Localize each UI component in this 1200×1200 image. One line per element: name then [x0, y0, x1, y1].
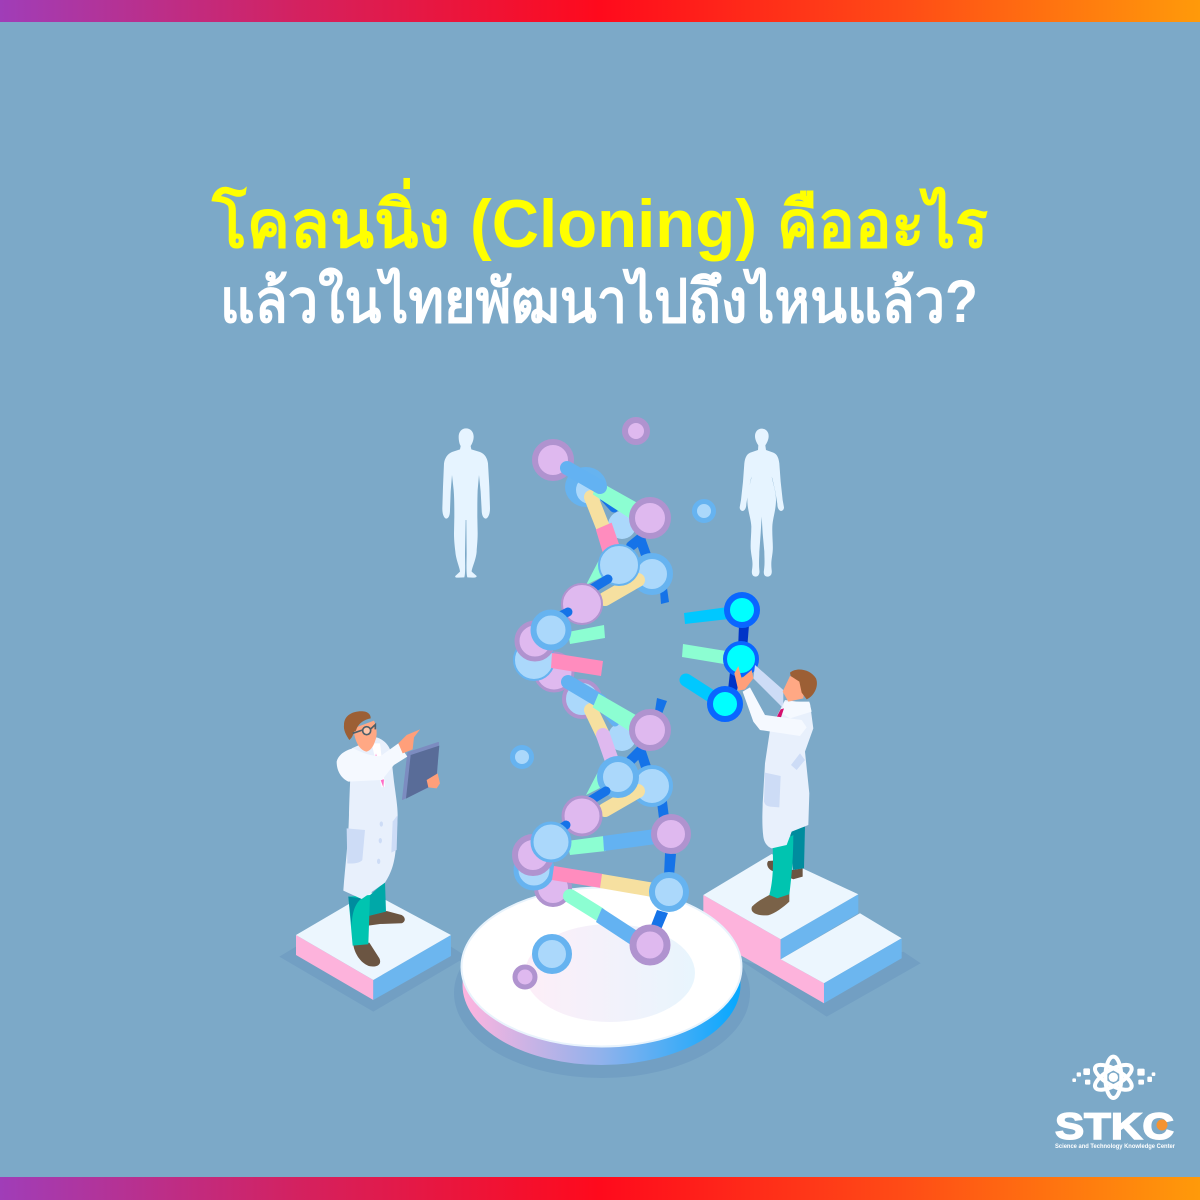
- title line 1: (Cloning): [470, 186, 757, 262]
- lab coat: [762, 700, 813, 848]
- back nodes: [564, 681, 600, 717]
- links: [738, 625, 749, 650]
- front shoe: [353, 943, 380, 967]
- cluster left: [535, 653, 573, 691]
- title line 1: คืออะไร: [777, 186, 988, 261]
- collar and tie: [782, 702, 812, 718]
- disc top: [462, 888, 742, 1046]
- title line 1: [211, 177, 988, 262]
- floating molecules: [512, 420, 714, 987]
- disc inner ellipse: [525, 924, 695, 1022]
- title: [211, 177, 988, 335]
- back arm: [753, 665, 783, 708]
- cyan nodes: [727, 595, 757, 625]
- pocket: [764, 773, 781, 807]
- cyan bars: [684, 607, 729, 624]
- back leg: [790, 827, 805, 870]
- tablet: [403, 743, 438, 799]
- title line 1: โคลนนิ่ง: [211, 177, 450, 261]
- molecule right blue: [694, 502, 714, 520]
- upper step top: [703, 854, 858, 939]
- front shoe: [752, 893, 789, 915]
- platform top: [296, 892, 451, 980]
- disc side: [462, 905, 740, 1065]
- node purple bottom: [633, 928, 667, 962]
- hand: [734, 666, 753, 691]
- molecule disc purple: [515, 967, 535, 987]
- top gradient bar: [0, 0, 1200, 22]
- detached cyan DNA segment: [682, 595, 757, 719]
- node purple: [632, 712, 668, 748]
- front leg: [348, 895, 370, 946]
- node blue large: [599, 545, 639, 585]
- node purple centre: [563, 797, 601, 835]
- title line 2: แล้วในไทยพัฒนาไปถึงไหนแล้ว?: [220, 266, 978, 335]
- left platform: [279, 892, 467, 1012]
- green bar: [682, 644, 726, 664]
- bottom gradient bar: [0, 1177, 1200, 1200]
- molecule disc blue: [535, 937, 569, 971]
- platform shadow: [740, 952, 921, 1017]
- back nodes: [565, 467, 607, 507]
- node blue right low: [652, 875, 686, 909]
- left scientist: [337, 711, 440, 967]
- tablet hand: [427, 773, 440, 788]
- logo orange dot: [1156, 1120, 1168, 1130]
- shirt and tie: [372, 743, 385, 787]
- lab coat: [343, 737, 398, 899]
- STKC logo: [1055, 1057, 1176, 1150]
- head: [783, 676, 805, 702]
- back links: [604, 497, 614, 508]
- lower step top: [781, 913, 902, 983]
- arm: [337, 743, 407, 782]
- pointing hand: [398, 729, 420, 753]
- DNA helix lower: [515, 681, 688, 962]
- glasses: [353, 725, 375, 735]
- node purple right: [654, 817, 688, 851]
- pocket: [347, 828, 365, 864]
- DNA helix upper: [514, 442, 670, 691]
- node blue left: [532, 823, 570, 861]
- back shoe: [368, 911, 405, 926]
- arm: [743, 687, 807, 736]
- node blue centre: [600, 759, 636, 795]
- platform blue side: [373, 935, 451, 1000]
- platform shadow: [279, 947, 467, 1012]
- lower step blue side: [824, 938, 902, 1003]
- logo tagline: Science and Technology Knowledge Center: [1055, 1144, 1176, 1150]
- node purple centre: [562, 584, 602, 624]
- logo atom emblem: [1072, 1057, 1155, 1098]
- disc shadow: [454, 908, 750, 1078]
- platform pink side: [703, 895, 824, 1003]
- logo wordmark: STKC: [1055, 1106, 1174, 1147]
- node top left: [535, 442, 571, 478]
- back leg: [368, 882, 386, 916]
- right scientist: [734, 665, 817, 915]
- node blue right: [633, 767, 671, 805]
- icon: male human silhouette: [442, 428, 490, 578]
- upper step blue side: [781, 894, 858, 959]
- coat buttons: [377, 821, 383, 864]
- node blue right: [634, 556, 670, 592]
- molecule top purple: [625, 420, 647, 442]
- central disc platform: [454, 888, 750, 1078]
- front leg: [769, 835, 793, 898]
- icon: female human silhouette: [740, 429, 784, 577]
- molecule left blue: [512, 748, 532, 766]
- back shoe: [767, 861, 803, 879]
- platform pink side: [296, 935, 373, 1000]
- hair: [790, 669, 817, 699]
- right stepped platform: [703, 854, 921, 1017]
- node purple upper right: [632, 500, 668, 536]
- lower rungs: [515, 825, 676, 932]
- head: [353, 721, 377, 752]
- hair: [344, 711, 371, 740]
